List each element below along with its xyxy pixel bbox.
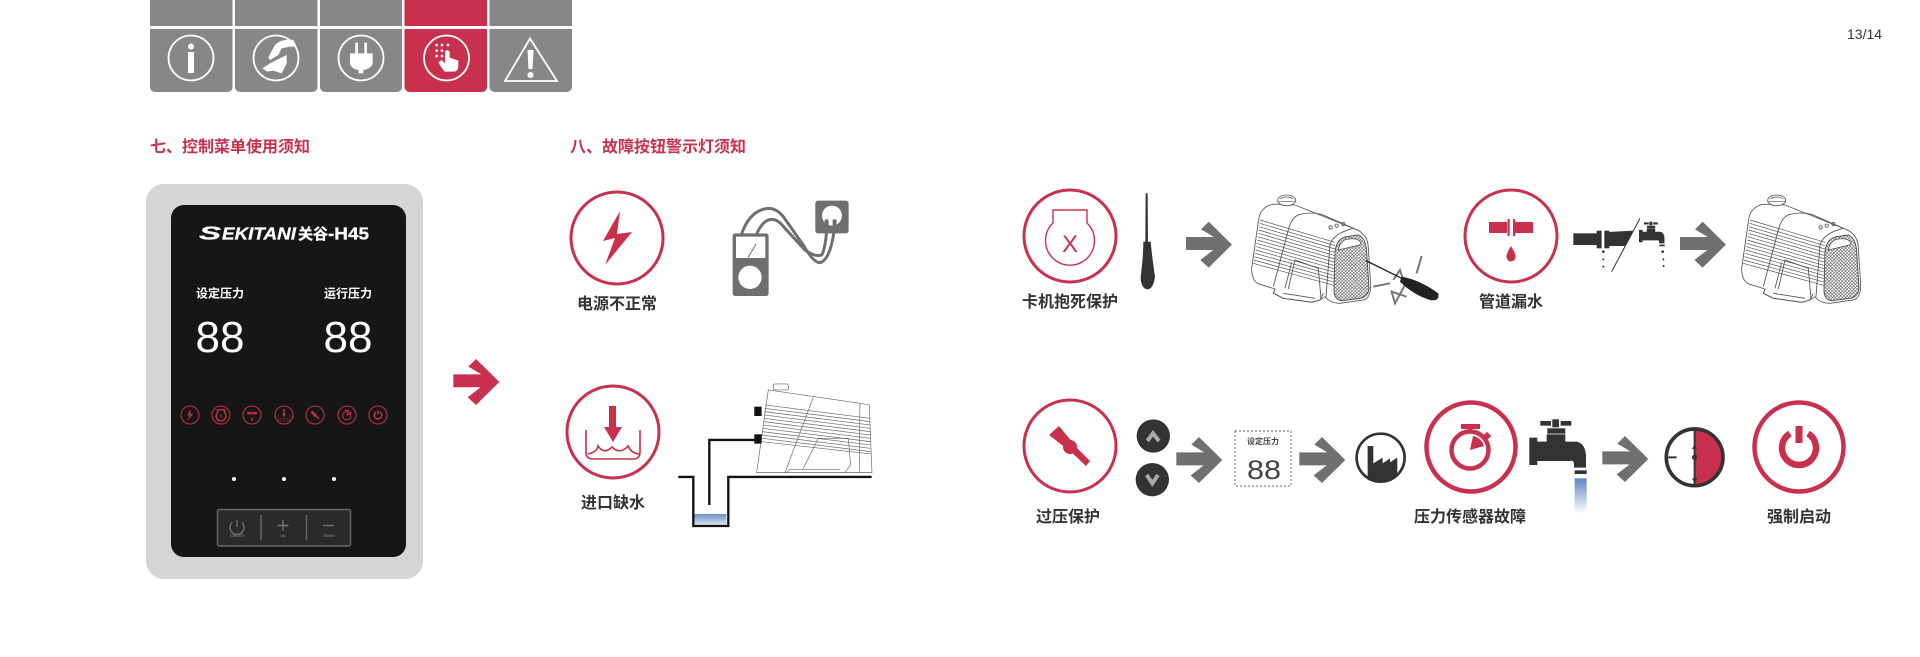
label: power abnormal: 电源不正常	[577, 295, 657, 313]
tab 4: touch menu, active	[404, 0, 487, 92]
illustration: pump with screwdriver	[1252, 195, 1439, 303]
icon: down button	[1136, 463, 1169, 496]
label: running pressure: 运行压力	[324, 286, 372, 300]
icon: power abnormal	[571, 192, 663, 284]
page number: 13/14	[1847, 26, 1882, 42]
label: pipe leak: 管道漏水	[1479, 292, 1543, 311]
brand logo: 关谷	[298, 226, 328, 243]
display: set pressure value: 88	[196, 313, 244, 362]
tab 1: info	[150, 0, 232, 92]
brand logo	[199, 224, 369, 244]
brand logo: EKITANI	[222, 224, 297, 244]
tab bar navigation	[150, 0, 572, 92]
button strip: up	[280, 533, 286, 538]
heading: section 8: 八、故障按钮警示灯须知	[570, 137, 746, 156]
brand logo: S	[199, 224, 221, 244]
arrow: gray	[1602, 436, 1648, 482]
icon: screwdriver	[1141, 193, 1155, 289]
brand logo: -H45	[328, 224, 369, 244]
set pressure readout	[1235, 431, 1291, 486]
label: set pressure: 设定压力	[196, 286, 244, 300]
icon: motor jam protection	[1024, 190, 1116, 282]
panel: control panel device	[146, 184, 423, 579]
button strip: switch	[230, 533, 244, 538]
arrow: gray	[1680, 222, 1726, 268]
button strip: down	[323, 533, 335, 538]
icon: up button	[1137, 419, 1170, 453]
icon: pressure sensor fault	[1426, 402, 1516, 492]
label: motor jam protection: 卡机抱死保护	[1022, 292, 1118, 311]
icon: factory reset	[1357, 434, 1405, 485]
display: running pressure value: 88	[324, 313, 372, 362]
tab 3: plug	[320, 0, 402, 92]
tab 2: hand	[235, 0, 318, 92]
icon: overpressure protection	[1024, 400, 1116, 492]
arrow: gray	[1176, 437, 1222, 483]
status dots	[232, 477, 336, 481]
tab 5: warning	[490, 0, 572, 92]
indicator icons row	[181, 406, 387, 424]
arrow: gray	[1186, 222, 1232, 268]
icon: running faucet	[1529, 419, 1587, 513]
arrow: red	[453, 359, 499, 405]
icon: multimeter and socket	[733, 201, 849, 296]
set pressure readout: 设定压力	[1247, 436, 1279, 446]
illustration: pump	[1742, 195, 1861, 303]
label: force start: 强制启动	[1767, 507, 1831, 526]
icon: inlet water shortage	[567, 386, 659, 478]
button strip	[218, 510, 350, 546]
label: overpressure protection: 过压保护	[1036, 508, 1100, 526]
heading: section 7: 七、控制菜单使用须知	[150, 137, 310, 156]
indicator icons row: X	[219, 414, 223, 420]
icon: pipe leak	[1465, 190, 1557, 282]
set pressure readout: 88	[1247, 455, 1281, 485]
icon: motor jam protection: X	[1062, 231, 1078, 258]
icon: half clock	[1666, 429, 1723, 486]
arrow: gray	[1299, 437, 1345, 483]
diagram: pump above low water well	[678, 384, 872, 526]
icon: leaking pipe and faucet	[1573, 218, 1665, 272]
icon: force start	[1754, 402, 1844, 492]
label: pressure sensor fault: 压力传感器故障	[1414, 507, 1526, 526]
label: inlet water shortage: 进口缺水	[581, 494, 645, 512]
